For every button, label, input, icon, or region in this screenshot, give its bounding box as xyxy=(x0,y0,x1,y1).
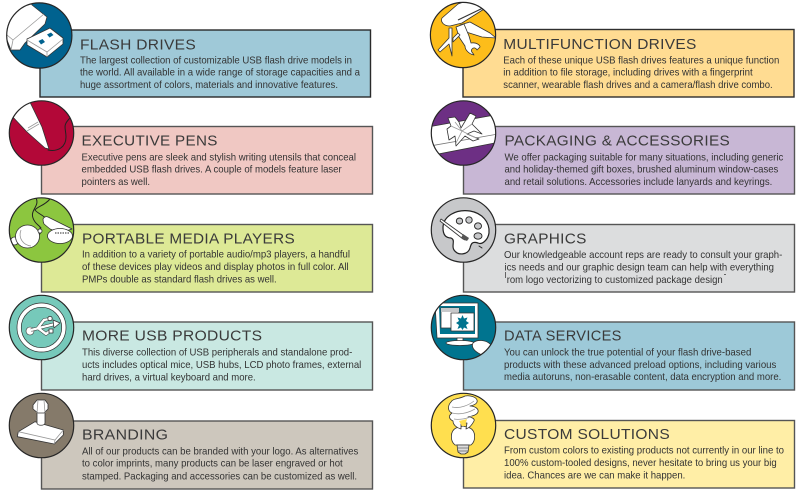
panel: packaging and accessories xyxy=(428,101,794,194)
text: more usb products description: hard drives, a virtual keyboard and more. xyxy=(82,372,256,383)
text: custom solutions description: 100% custom-tooled designs, never hesitate to bring us your big xyxy=(504,458,777,469)
text: multifunction drives description: scanner, wearable flash drives and a camera/flash drive combo. xyxy=(503,80,773,91)
icon: rubber stamp xyxy=(9,393,74,458)
heading: packaging and accessories: PACKAGING & ACCESSORIES xyxy=(504,134,730,150)
heading: graphics: GRAPHICS xyxy=(504,232,587,248)
text: portable media players description: PMPs double as standard flash drives as well. xyxy=(82,274,277,286)
text: multifunction drives description xyxy=(503,55,779,91)
text: data services description: media autoruns, non-erasable content, data encryption and more. xyxy=(504,372,781,383)
heading: branding: BRANDING xyxy=(82,427,168,443)
panel: more usb products xyxy=(9,295,373,390)
icon: computer monitor xyxy=(431,295,500,360)
text: portable media players description: of these devices play videos and display photos in full color. All xyxy=(82,262,349,273)
panel: branding xyxy=(9,393,373,489)
text: flash drives description: The largest collection of customizable USB flash drive models in xyxy=(80,56,352,66)
text: graphics description xyxy=(504,250,782,286)
panel: portable media players xyxy=(9,198,373,292)
panel: custom solutions xyxy=(431,393,794,488)
heading: more usb products: MORE USB PRODUCTS xyxy=(82,329,262,345)
text: custom solutions description xyxy=(504,446,784,482)
text: branding description: stamped. Packaging and accessories can be customized as well. xyxy=(82,471,357,482)
heading: executive pens: EXECUTIVE PENS xyxy=(82,134,218,150)
icon: gift box with bow xyxy=(428,101,500,165)
text: data services description: You can unlock the true potential of your flash drive-based xyxy=(504,348,752,358)
icon: multitool xyxy=(430,0,496,68)
text: graphics description: ics needs and our graphic design team can help with everything xyxy=(504,262,774,274)
text: flash drives description: the world. All available in a wide range of storage capacities and a xyxy=(80,68,360,79)
text: flash drives description xyxy=(80,56,360,91)
text: executive pens description xyxy=(82,152,356,188)
text: executive pens description: Executive pens are sleek and stylish writing utensils that conceal xyxy=(82,152,356,163)
text: custom solutions description: idea. Chances are we can make it happen. xyxy=(504,470,685,482)
heading: portable media players: PORTABLE MEDIA PLAYERS xyxy=(82,232,295,248)
text: executive pens description: embedded USB flash drives. A couple of models feature laser xyxy=(82,165,342,176)
text: more usb products description xyxy=(82,348,361,383)
text: multifunction drives description: Each of these unique USB flash drives features a unique function xyxy=(503,55,779,66)
text: flash drives description: huge assortment of colors, materials and innovative features. xyxy=(80,80,338,91)
icon: compact fluorescent bulb xyxy=(431,393,496,458)
heading: flash drives: FLASH DRIVES xyxy=(80,37,196,53)
panel: multifunction drives xyxy=(430,0,794,97)
panel: flash drives xyxy=(0,0,370,97)
heading: multifunction drives: MULTIFUNCTION DRIVES xyxy=(503,37,697,53)
text: multifunction drives description: in addition to file storage, including drives with a fingerprint xyxy=(503,68,753,78)
text: graphics description: Our knowledgeable account reps are ready to consult your graph- xyxy=(504,250,782,261)
text: packaging and accessories description xyxy=(504,152,783,188)
panel: graphics xyxy=(431,198,794,292)
text: branding description xyxy=(82,446,358,482)
text: branding description: to color imprints, many products can be laser engraved or hot xyxy=(82,459,343,470)
icon: usb symbol xyxy=(9,295,74,360)
text: data services description: products with these advanced preload options, including various xyxy=(504,360,776,371)
text: portable media players description xyxy=(82,250,350,286)
text: portable media players description: In addition to a variety of portable audio/mp3 players, a handful xyxy=(82,250,350,261)
text: branding description: All of our products can be branded with your logo. As alternatives xyxy=(82,446,358,457)
text: packaging and accessories description: and holiday-themed gift boxes, brushed aluminum window-cases xyxy=(504,165,778,176)
heading: custom solutions: CUSTOM SOLUTIONS xyxy=(504,427,670,443)
text: graphics description: rom logo vectorizing to customized package design xyxy=(507,275,723,286)
text: custom solutions description: From custom colors to existing products not currently in our line to xyxy=(504,446,784,456)
icon: usb flash drive xyxy=(0,0,72,68)
icon: earbuds xyxy=(9,198,74,262)
icon: paint palette xyxy=(431,198,496,262)
text: packaging and accessories description: We offer packaging suitable for many situations, including generic xyxy=(504,152,783,163)
panel: data services xyxy=(431,295,794,390)
text: more usb products description: ucts includes optical mice, USB hubs, LCD photo frames, external xyxy=(82,360,361,371)
text: packaging and accessories description: and retail solutions. Accessories include lanyards and keyrings. xyxy=(504,177,772,188)
panel: executive pens xyxy=(9,98,373,194)
heading: data services: DATA SERVICES xyxy=(504,329,622,345)
text: more usb products description: This diverse collection of USB peripherals and standalone prod- xyxy=(82,348,352,359)
text: executive pens description: pointers as well. xyxy=(82,177,150,188)
icon: pen xyxy=(9,98,74,165)
text: data services description xyxy=(504,348,781,383)
